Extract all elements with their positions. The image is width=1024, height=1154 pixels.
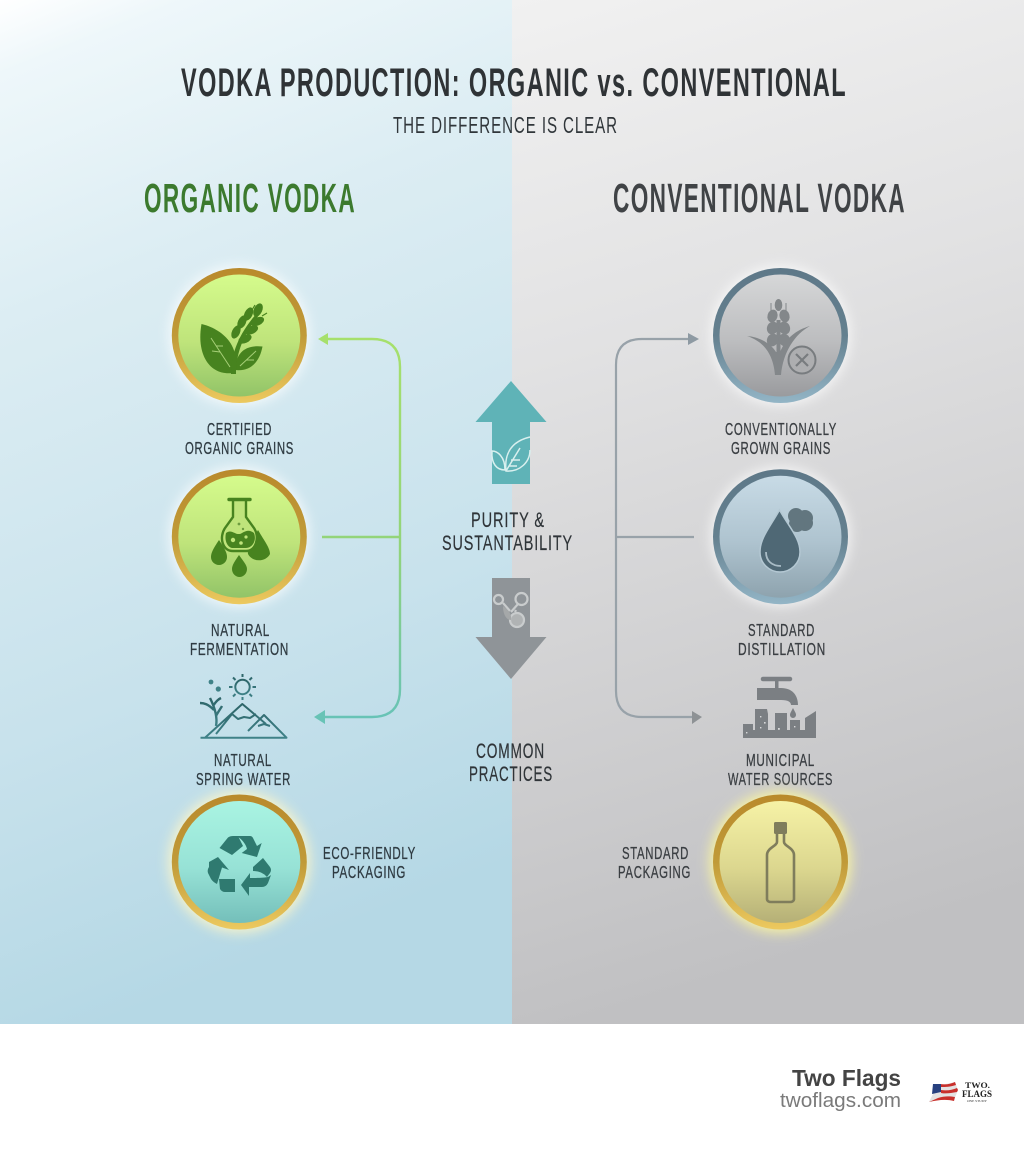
center arrow: up with leaf xyxy=(476,381,546,484)
icon: faucet and city xyxy=(743,679,816,738)
label: natural fermentation xyxy=(190,620,289,659)
subtitle: THE DIFFERENCE IS CLEAR xyxy=(393,112,618,138)
badge: standard packaging xyxy=(710,791,852,933)
footer url: twoflags.com xyxy=(780,1090,901,1112)
label: standard distillation: DISTILLATION xyxy=(738,639,826,659)
label: standard distillation xyxy=(738,620,826,659)
label: conventionally grown grains xyxy=(725,419,837,458)
label: standard packaging: STANDARD xyxy=(622,843,689,863)
connector arrows: conventional side xyxy=(616,333,702,724)
label: natural fermentation: FERMENTATION xyxy=(190,639,289,659)
label: conventionally grown grains: CONVENTIONALLY xyxy=(725,419,837,439)
badge: eco-friendly packaging xyxy=(168,791,310,933)
badge: natural fermentation xyxy=(169,467,309,607)
icon: wheat with cross xyxy=(747,299,816,375)
icon: bottle xyxy=(767,822,794,902)
badge: standard distillation xyxy=(710,467,850,607)
label: municipal water sources xyxy=(728,750,833,789)
icon: mountains, sun and tree xyxy=(200,674,286,738)
label: natural spring water: NATURAL xyxy=(214,750,272,770)
footer brand name: Two Flags xyxy=(792,1065,901,1091)
label: eco-friendly packaging xyxy=(323,843,416,882)
background panel: conventional side xyxy=(512,0,1024,1024)
label: standard packaging xyxy=(618,843,691,882)
center label: common practices: COMMON xyxy=(476,739,545,763)
heading: organic vodka: ORGANIC VODKA xyxy=(144,175,356,221)
center arrow: down with molecule xyxy=(476,578,546,679)
label: municipal water sources: MUNICIPAL xyxy=(746,750,815,770)
center label: purity and sustainability: PURITY & xyxy=(471,508,545,532)
label: certified organic grains: ORGANIC GRAINS xyxy=(185,438,294,458)
label: municipal water sources: WATER SOURCES xyxy=(728,769,833,789)
label: eco-friendly packaging: PACKAGING xyxy=(332,862,406,882)
badge: conventionally grown grains xyxy=(710,266,850,406)
label: natural spring water: SPRING WATER xyxy=(196,769,291,789)
label: natural spring water xyxy=(196,750,291,789)
background panel: organic side xyxy=(0,0,512,1024)
connector arrows: organic side xyxy=(314,333,400,724)
logo: two flags xyxy=(929,1080,992,1103)
label: certified organic grains: CERTIFIED xyxy=(207,419,272,439)
label: certified organic grains xyxy=(185,419,294,458)
icon: recycle xyxy=(208,836,271,896)
badge: certified organic grains xyxy=(169,266,309,406)
center label: purity and sustainability xyxy=(442,508,573,555)
center label: purity and sustainability: SUSTANTABILITY xyxy=(442,531,573,555)
label: eco-friendly packaging: ECO-FRIENDLY xyxy=(323,843,416,863)
center label: common practices xyxy=(469,739,553,786)
label: standard packaging: PACKAGING xyxy=(618,862,691,882)
label: standard distillation: STANDARD xyxy=(748,620,815,640)
logo: two flags: FLAGS xyxy=(962,1089,992,1099)
logo: two flags: TWO. xyxy=(965,1080,990,1090)
icon: leaves and wheat xyxy=(200,302,267,374)
icon: drop with cloud xyxy=(760,508,813,572)
label: natural fermentation: NATURAL xyxy=(211,620,270,640)
label: conventionally grown grains: GROWN GRAINS xyxy=(731,438,831,458)
center label: common practices: PRACTICES xyxy=(469,762,553,786)
icon: flask and drops xyxy=(211,500,270,577)
logo: two flags: ONE STUDY xyxy=(967,1099,988,1103)
